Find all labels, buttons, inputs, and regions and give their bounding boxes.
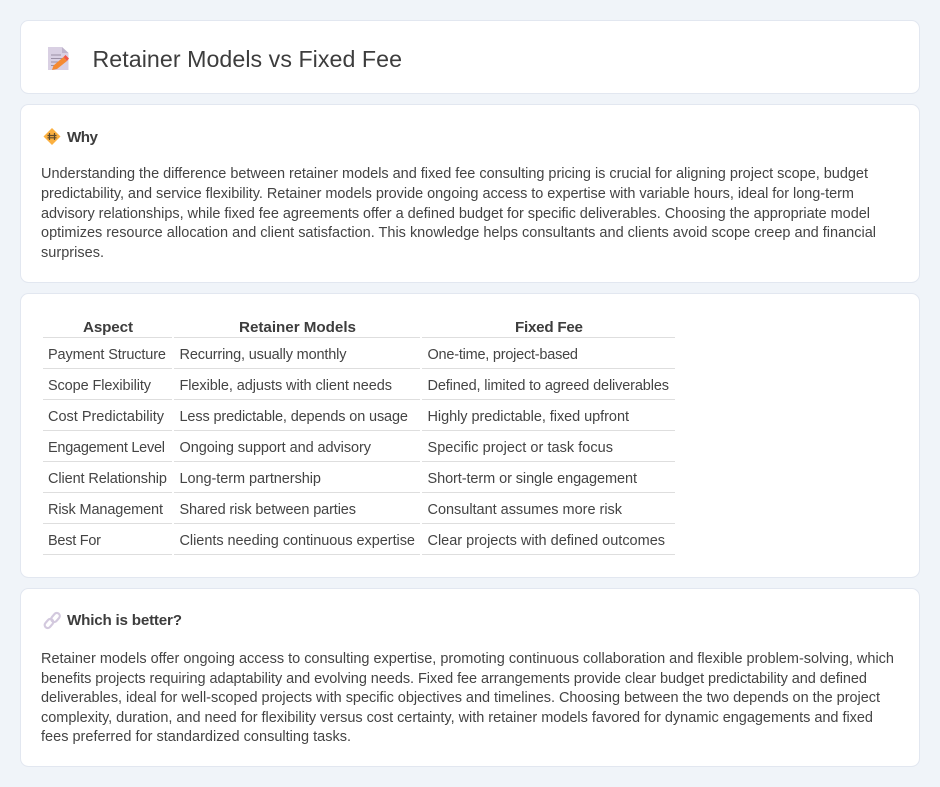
table header (83, 319, 583, 336)
panel: title header (20, 20, 920, 94)
text block: why paragraph (41, 166, 876, 261)
row: engagement level (48, 440, 613, 456)
row: best for: Clients needing continuous expertise (180, 533, 415, 549)
title: Retainer Models vs Fixed Fee (92, 46, 402, 72)
text block: why paragraph: Understanding the difference between retainer models and fixed fee consulting pricing is crucial for aligning project scope, budget (41, 166, 868, 182)
table header: Retainer Models (239, 319, 356, 336)
text block: which is better paragraph: fees preferred for standardized consulting tasks. (41, 729, 351, 745)
table header: Fixed Fee (515, 319, 583, 336)
row: client relationship: Short-term or single engagement (428, 471, 637, 487)
panel: why (20, 104, 920, 282)
row: cost predictability: Less predictable, depends on usage (180, 409, 408, 425)
row: client relationship (48, 471, 637, 487)
text block: which is better paragraph: Retainer models offer ongoing access to consulting expertise, promoting continuous collaboration and flexible problem-solving, which (41, 651, 894, 667)
row: scope flexibility: Defined, limited to agreed deliverables (428, 378, 669, 394)
panel: which is better (20, 588, 920, 766)
heading: which is better: Which is better? (67, 612, 182, 629)
row: payment structure: One-time, project-based (428, 347, 578, 363)
row: scope flexibility (48, 378, 669, 394)
row: best for (48, 533, 665, 549)
row: risk management: Shared risk between parties (180, 502, 356, 518)
text block: why paragraph: advisory relationships, while fixed fee agreements offer a defined budget for specific deliverables. Choosing the appropriate model (41, 206, 870, 222)
icon: document with pencil (48, 47, 69, 70)
icon: link (43, 612, 61, 629)
row: risk management: Risk Management (48, 502, 163, 518)
row: client relationship: Client Relationship (48, 471, 167, 487)
table header: Aspect (83, 319, 133, 336)
row: cost predictability (48, 409, 629, 425)
row: best for: Best For (48, 533, 101, 549)
row: engagement level: Engagement Level (48, 440, 165, 456)
row: client relationship: Long-term partnership (180, 471, 321, 487)
row: engagement level: Ongoing support and advisory (180, 440, 372, 456)
text block: why paragraph: optimizes resource allocation and client satisfaction. This knowledge helps consultants and clients avoid scope creep and financial (41, 225, 876, 241)
row: cost predictability: Highly predictable, fixed upfront (428, 409, 629, 425)
icon: warning diamond (44, 128, 60, 145)
row: risk management: Consultant assumes more risk (428, 502, 623, 518)
row: payment structure: Recurring, usually monthly (180, 347, 347, 363)
text block: why paragraph: predictability, and service flexibility. Retainer models provide ongoing access to expertise with variable hours, ideal for long-term (41, 186, 854, 202)
row: best for: Clear projects with defined outcomes (428, 533, 665, 549)
heading: why: Why (67, 129, 99, 146)
row: payment structure (48, 347, 578, 363)
panel: comparison table (20, 294, 920, 578)
text block: why paragraph: surprises. (41, 245, 104, 261)
row: engagement level: Specific project or task focus (428, 440, 613, 456)
text block: which is better paragraph: benefits projects requiring adaptability and evolving needs. Fixed fee arrangements provide clear budget predictability and defined (41, 671, 867, 687)
row: cost predictability: Cost Predictability (48, 409, 165, 425)
text block: which is better paragraph: complexity, duration, and need for flexibility versus cost certainty, with retainer models favored for dynamic engagements and fixed (41, 710, 873, 726)
text block: which is better paragraph (41, 651, 894, 745)
row: payment structure: Payment Structure (48, 347, 166, 363)
row: scope flexibility: Scope Flexibility (48, 378, 152, 394)
text block: which is better paragraph: deliverables, ideal for well-scoped projects with specific objectives and timelines. Choosing between the two depends on the project (41, 690, 880, 706)
row: risk management (48, 502, 623, 518)
row: scope flexibility: Flexible, adjusts with client needs (180, 378, 392, 394)
